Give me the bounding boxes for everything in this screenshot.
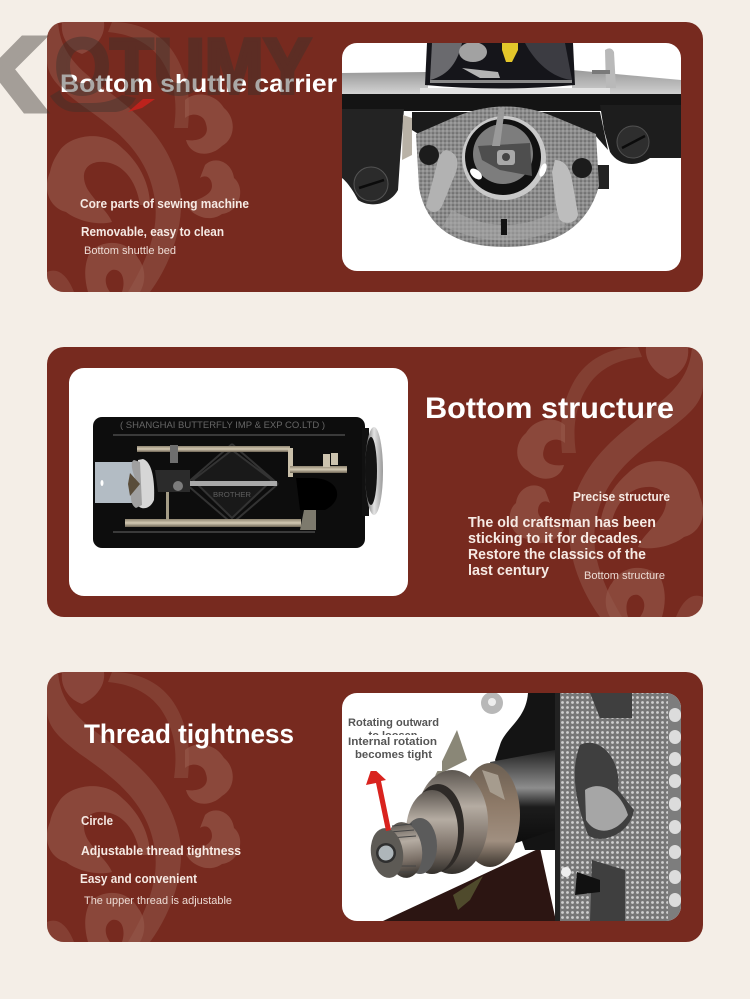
callout: internal rotation xyxy=(348,736,437,761)
callout: outward rotation: Rotating outward xyxy=(348,717,439,729)
callout: outward rotation xyxy=(348,718,438,735)
panel: thread tightness xyxy=(47,672,703,942)
heading: Bottom shuttle carrier xyxy=(60,70,337,98)
cloud pattern xyxy=(47,22,240,292)
paragraph: last century xyxy=(468,563,549,579)
heading: Thread tightness xyxy=(84,719,294,749)
arrow xyxy=(366,767,391,831)
paragraph: sticking to it for decades. xyxy=(468,531,642,547)
photo: thread tension assembly xyxy=(342,692,681,921)
paragraph: The old craftsman has been xyxy=(468,515,656,531)
cloud pattern xyxy=(510,347,703,617)
feature text: Adjustable thread tightness xyxy=(81,844,241,858)
watermark logo: OTUMY xyxy=(55,22,311,110)
callout: outward rotation: to loosen xyxy=(369,730,418,742)
heading: Bottom structure xyxy=(425,392,674,425)
caption: Bottom structure xyxy=(584,570,665,582)
panel: bottom shuttle carrier xyxy=(47,22,703,292)
caption: Bottom shuttle bed xyxy=(84,245,176,257)
panel: bottom structure xyxy=(47,347,703,617)
paragraph xyxy=(468,515,656,579)
photo: machine underside: BROTHER xyxy=(213,492,251,499)
feature text: Core parts of sewing machine xyxy=(80,197,249,211)
logo accent slash xyxy=(128,99,155,112)
feature text: Easy and convenient xyxy=(80,872,198,886)
feature text: Removable, easy to clean xyxy=(81,225,224,239)
plate lettering: ( SHANGHAI BUTTERFLY IMP & EXP CO.LTD ) xyxy=(120,420,325,431)
photo: shuttle carrier xyxy=(342,42,681,271)
feature text: Circle xyxy=(81,814,113,828)
paragraph: Restore the classics of the xyxy=(468,547,646,563)
callout: internal rotation: Internal rotation xyxy=(348,736,437,748)
watermark logo xyxy=(0,17,311,132)
caption: The upper thread is adjustable xyxy=(84,895,232,907)
feature text: Precise structure xyxy=(573,490,670,504)
cloud pattern xyxy=(47,672,240,942)
callout: internal rotation: becomes tight xyxy=(355,749,432,761)
photo: machine underside xyxy=(69,368,408,596)
